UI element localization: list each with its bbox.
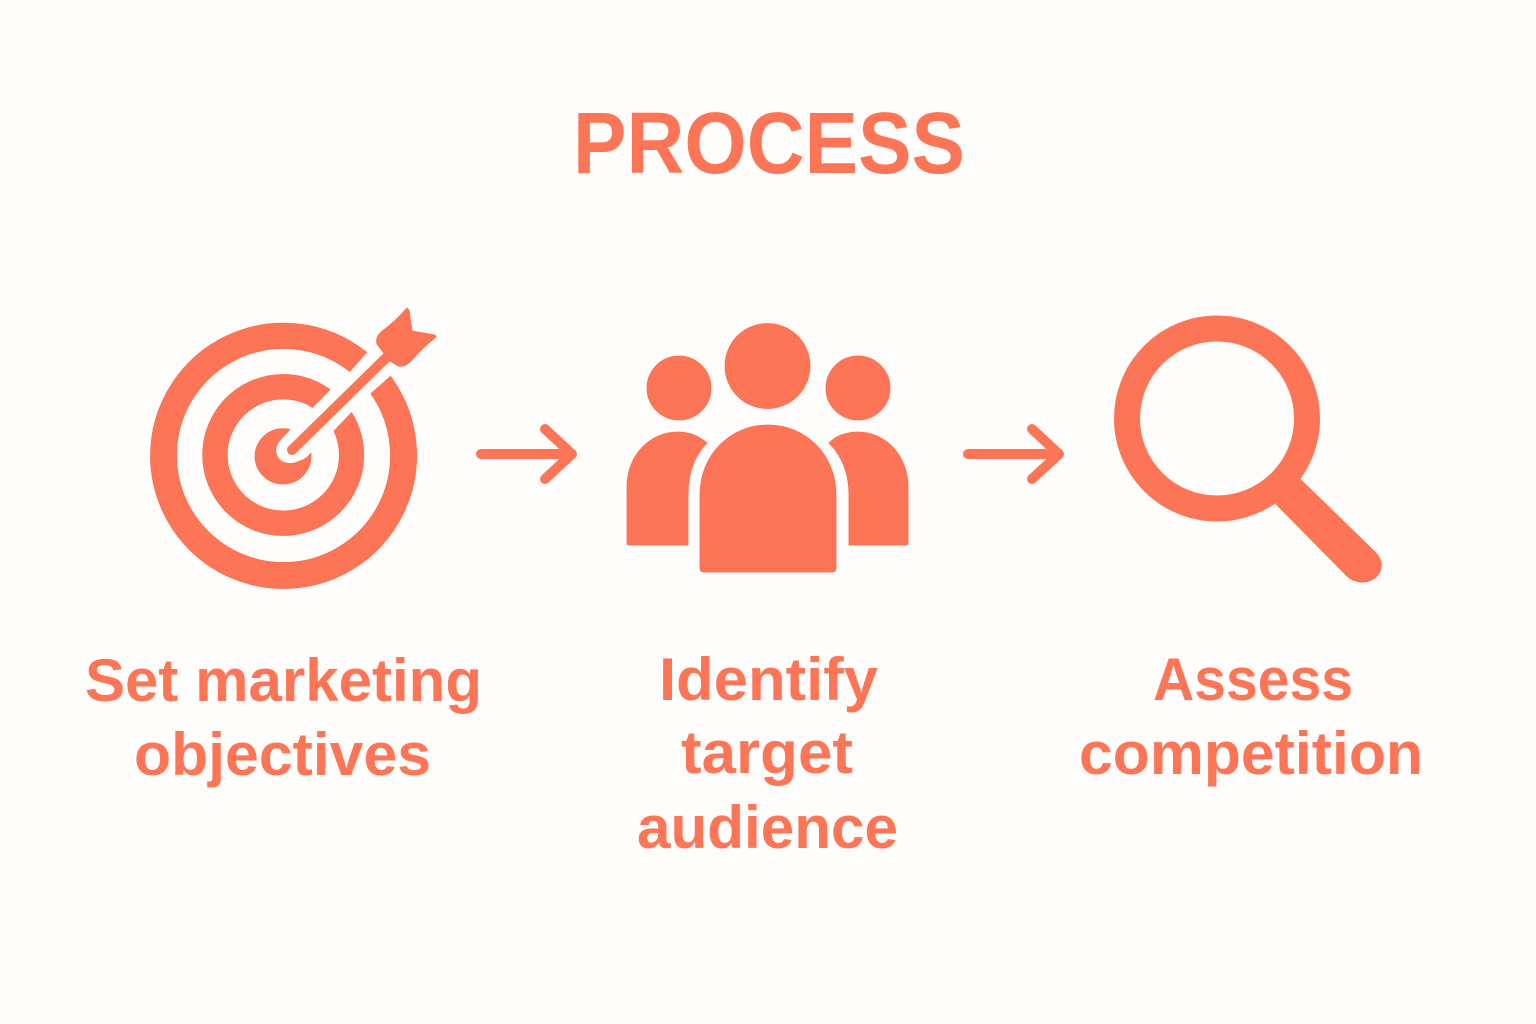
label: assess competition: Assess	[1153, 646, 1353, 713]
label: identify target audience: audience	[637, 794, 898, 861]
step 3: assess competition	[1079, 328, 1423, 787]
lens ring	[1127, 328, 1307, 508]
label: set marketing objectives	[85, 647, 482, 788]
right head	[826, 356, 890, 420]
arrow: step 1 to step 2	[481, 429, 572, 479]
label: set marketing objectives: Set marketing	[85, 647, 482, 714]
left body	[627, 432, 707, 545]
label: assess competition: competition	[1079, 720, 1423, 787]
step 2: identify target audience	[627, 324, 908, 861]
label: identify target audience: target	[681, 719, 853, 786]
icon: target with arrow	[150, 308, 436, 589]
arrow shaft	[292, 357, 387, 450]
handle	[1276, 479, 1381, 582]
bullseye	[255, 429, 311, 484]
label: identify target audience	[637, 646, 898, 861]
label: assess competition	[1079, 646, 1423, 787]
centre body	[700, 425, 836, 572]
icon: group of three people	[627, 324, 908, 572]
outer ring	[150, 323, 417, 589]
arrow fletching	[376, 308, 436, 366]
step 1: set marketing objectives	[85, 308, 482, 788]
left head	[647, 356, 711, 420]
label: identify target audience: Identify	[659, 646, 879, 713]
right body	[829, 432, 908, 545]
label: set marketing objectives: objectives	[134, 721, 431, 788]
title: PROCESS	[573, 95, 965, 192]
centre head	[725, 324, 810, 408]
middle ring	[203, 374, 364, 536]
icon: magnifying glass	[1127, 328, 1381, 582]
arrow: step 2 to step 3	[968, 429, 1059, 479]
